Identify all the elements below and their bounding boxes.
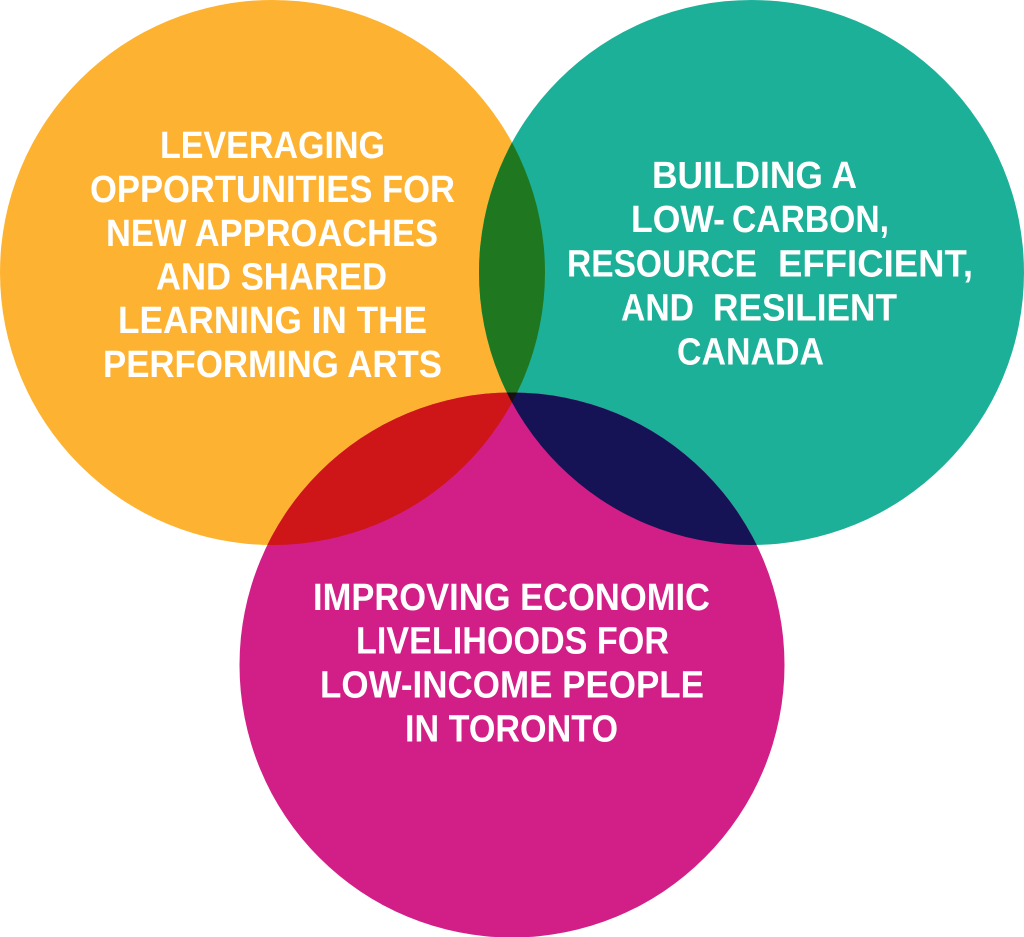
circle: economic livelihoods [240,392,784,937]
text: low-carbon Canada: EFFICIENT, [778,244,973,286]
overlap: all three circles [506,392,517,402]
text: economic livelihoods: IMPROVING ECONOMIC [313,577,710,619]
text: economic livelihoods: IN TORONTO [405,708,618,750]
text: economic livelihoods [313,577,710,750]
text: low-carbon Canada: BUILDING A [652,155,857,197]
text: performing arts: NEW APPROACHES [106,213,438,255]
overlap: teal and magenta [506,392,757,545]
text: low-carbon Canada: RESOURCE [567,244,757,286]
text: performing arts: OPPORTUNITIES FOR [90,169,455,211]
text: low-carbon Canada: RESILIENT [713,288,897,330]
text: performing arts: LEVERAGING [160,125,385,167]
text: performing arts: LEARNING IN THE [118,300,427,342]
overlap: orange and teal [479,142,545,392]
overlap: orange and magenta [267,392,517,545]
circle: low-carbon Canada [479,0,1024,545]
text: low-carbon Canada: CARBON, [732,199,889,241]
text: low-carbon Canada: LOW- [631,199,725,241]
text: low-carbon Canada: AND [621,288,694,330]
text: performing arts: PERFORMING ARTS [103,344,442,386]
text: performing arts [90,125,455,386]
text: low-carbon Canada: CANADA [677,332,824,374]
text: low-carbon Canada [567,155,973,374]
circle: performing arts [0,0,545,545]
text: economic livelihoods: LOW-INCOME PEOPLE [320,664,704,706]
text: performing arts: AND SHARED [156,256,387,298]
text: economic livelihoods: LIVELIHOODS FOR [356,620,669,662]
